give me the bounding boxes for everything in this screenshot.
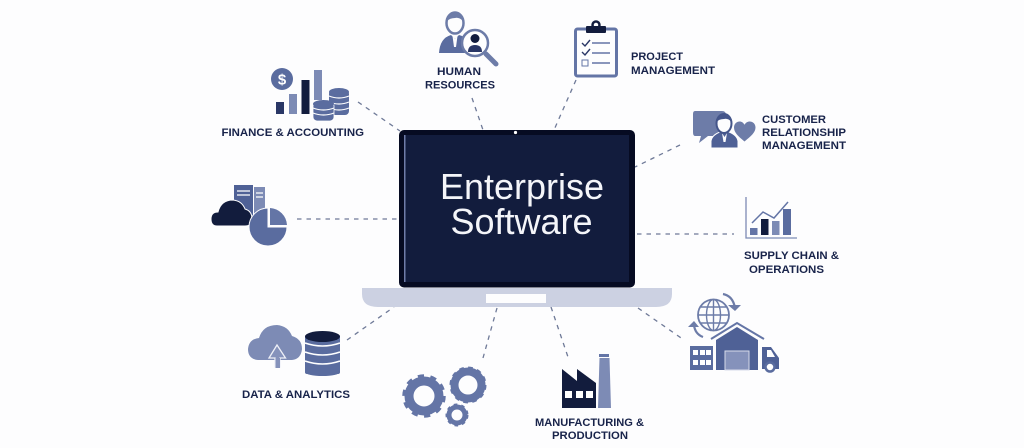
trackpad notch <box>486 294 546 303</box>
manufacturing icon <box>562 354 611 408</box>
label: data and analytics: DATA & ANALYTICS <box>242 389 350 401</box>
human resources icon <box>439 12 496 64</box>
label: supply chain and operations <box>744 250 839 276</box>
label: human resources: HUMAN <box>437 66 481 78</box>
gears icon <box>404 368 484 425</box>
screen subtitle: Software <box>450 201 593 242</box>
laptop base <box>362 288 672 307</box>
label: project management: PROJECT <box>631 51 683 63</box>
label: supply chain and operations: SUPPLY CHAIN & <box>744 250 839 262</box>
label: project management <box>631 51 715 77</box>
supply chain icon <box>746 197 797 238</box>
label: customer relationship management: RELATIONSHIP <box>762 127 846 139</box>
label: supply chain and operations: OPERATIONS <box>749 264 824 276</box>
label: human resources: RESOURCES <box>425 80 495 92</box>
label: manufacturing and production: MANUFACTURING & <box>535 417 644 429</box>
label: manufacturing and production: PRODUCTION <box>552 430 628 442</box>
laptop <box>362 130 672 307</box>
logistics icon <box>688 294 779 372</box>
project management icon <box>576 22 616 76</box>
label: customer relationship management: CUSTOMER <box>762 114 826 126</box>
dashed connector lines <box>297 80 734 358</box>
label: customer relationship management: MANAGEMENT <box>762 140 846 152</box>
screen <box>404 135 629 282</box>
label: human resources <box>425 66 495 92</box>
label: project management: MANAGEMENT <box>631 65 715 77</box>
webcam <box>514 131 517 134</box>
customer relationship icon <box>693 111 756 148</box>
finance icon <box>271 68 349 121</box>
laptop bezel <box>399 130 635 288</box>
label: manufacturing and production <box>535 417 644 442</box>
screen title: Enterprise <box>440 166 604 207</box>
finance icon: $ <box>278 72 287 88</box>
enterprise data center icon <box>211 185 287 246</box>
label: customer relationship management <box>762 114 846 152</box>
label: finance: FINANCE & ACCOUNTING <box>222 127 364 139</box>
data and analytics icon <box>248 325 340 376</box>
